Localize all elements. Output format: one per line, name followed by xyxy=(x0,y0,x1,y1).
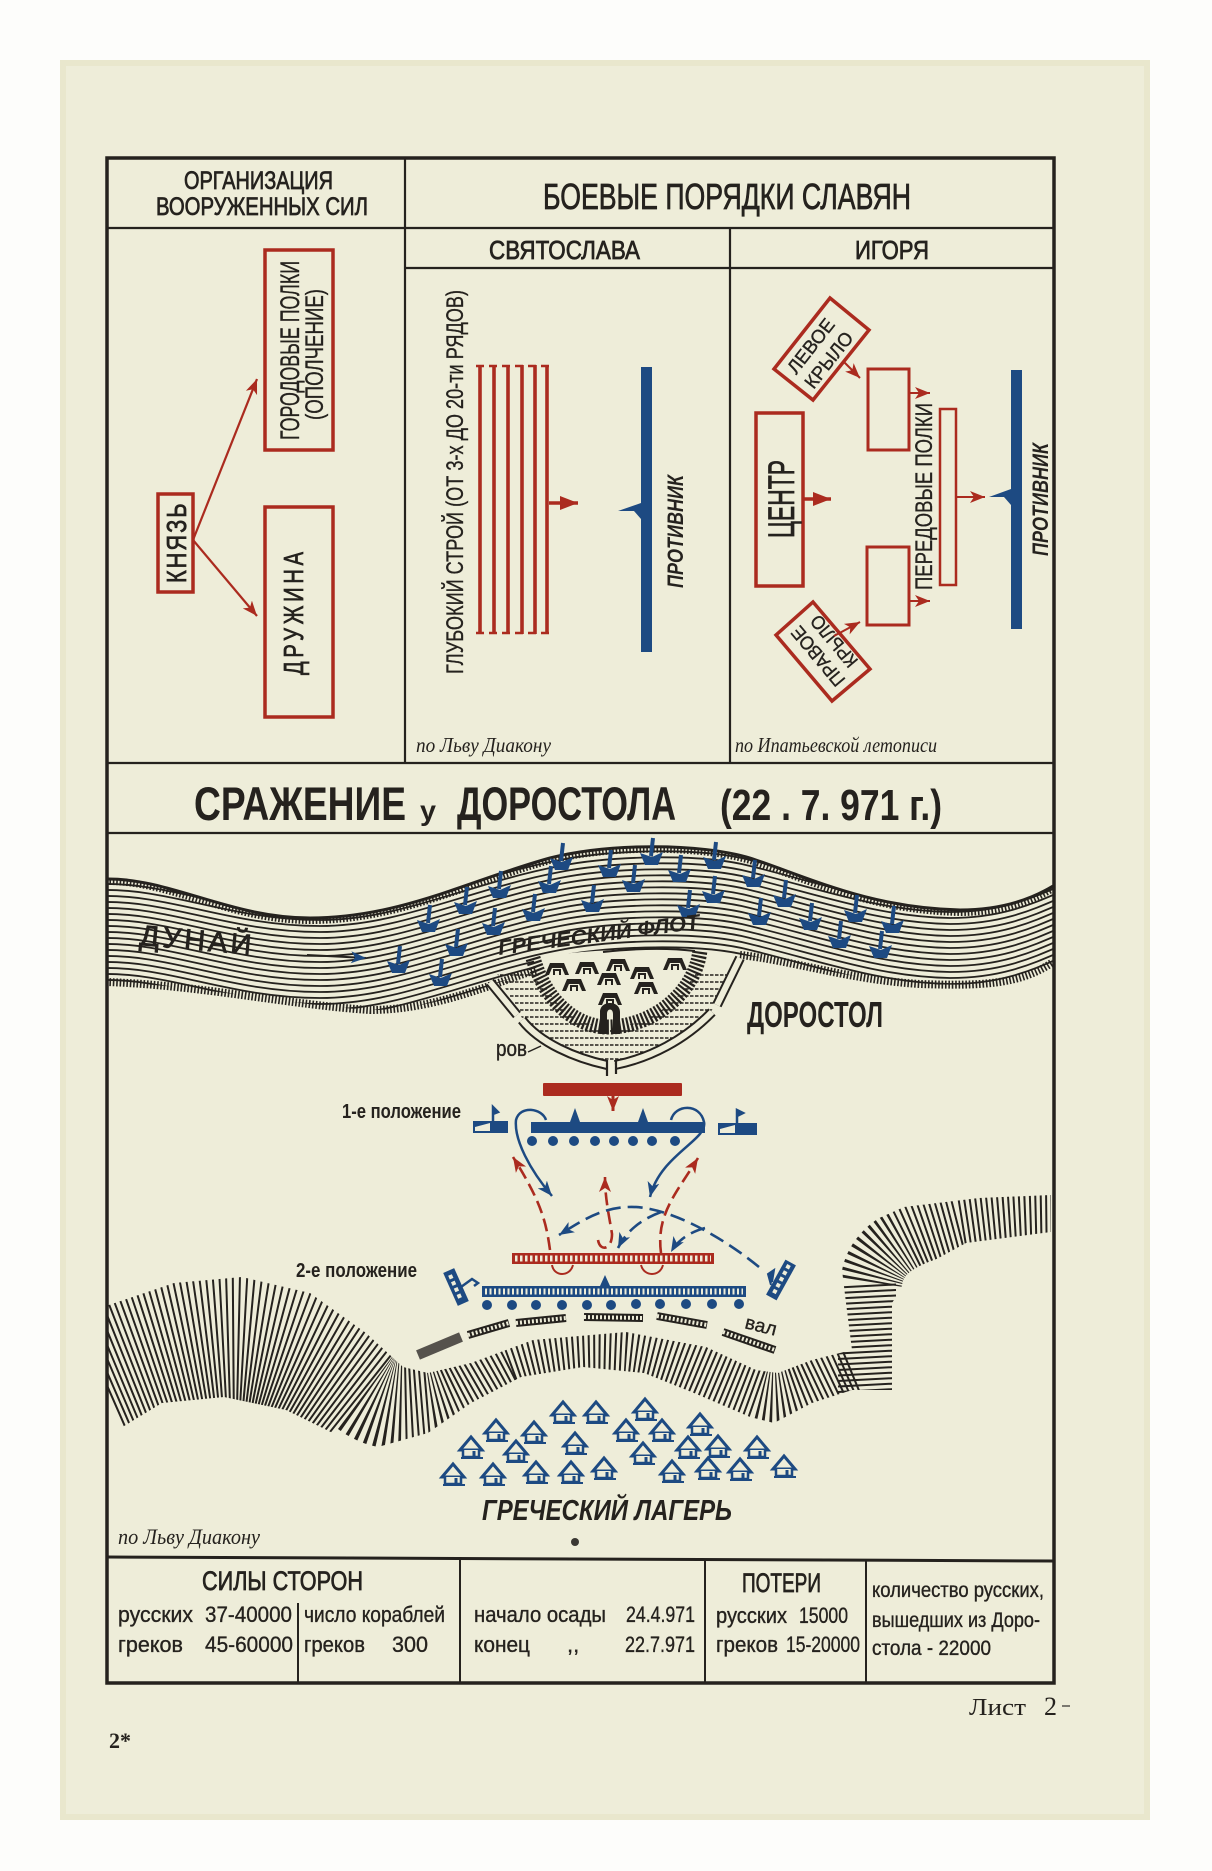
arrow from centre xyxy=(803,497,831,501)
heading: battle orders: БОЕВЫЕ ПОРЯДКИ СЛАВЯН xyxy=(543,176,911,217)
title: у xyxy=(420,795,436,826)
ships: 300 xyxy=(392,1632,428,1657)
box: druzhina: ДРУЖИНА xyxy=(279,551,310,675)
rotated caption: deep formation: ГЛУБОКИЙ СТРОЙ (ОТ 3-х ДО 20-ти РЯДОВ) xyxy=(441,290,469,674)
arrows from prince xyxy=(193,379,257,616)
sheet number: Лист xyxy=(969,1695,1027,1721)
label: rampart: вал xyxy=(743,1312,779,1341)
rampart segments xyxy=(418,1316,775,1355)
forward regiments label: ПЕРЕДОВЫЕ ПОЛКИ xyxy=(911,403,938,590)
blue enemy bar xyxy=(618,367,652,652)
box: city regiments: (ОПОЛЧЕНИЕ) xyxy=(301,289,329,420)
siege dates: конец xyxy=(474,1632,530,1657)
houses xyxy=(545,958,687,1005)
survivors note: количество русских, xyxy=(872,1579,1044,1602)
sheet number: 2 xyxy=(1044,1692,1057,1721)
hatched swamp band xyxy=(100,1213,1056,1405)
ships xyxy=(304,1602,445,1657)
blue dots xyxy=(482,1299,744,1310)
main frame xyxy=(107,158,1054,1683)
label: enemy: ПРОТИВНИК xyxy=(1028,442,1053,556)
Greek camp tents xyxy=(442,1399,796,1485)
panel: organisation of armed forces xyxy=(156,167,368,717)
losses: 15-20000 xyxy=(786,1632,860,1657)
box: druzhina xyxy=(265,507,333,717)
red ranks xyxy=(476,365,550,634)
label: moat: ров xyxy=(496,1036,527,1061)
forces: СИЛЫ СТОРОН xyxy=(202,1566,363,1596)
blue line xyxy=(531,1108,705,1133)
small arrows xyxy=(834,362,985,636)
left wing: КРЫЛО xyxy=(801,328,858,393)
forces xyxy=(118,1566,363,1657)
label: Dorostol: ДОРОСТОЛ xyxy=(747,994,883,1035)
forces: русских xyxy=(118,1602,193,1627)
right wing xyxy=(776,602,870,701)
blue comb bar xyxy=(482,1275,746,1297)
dot xyxy=(571,1538,579,1546)
gate xyxy=(600,1003,620,1034)
panel: Igor formation xyxy=(735,235,1053,757)
heading: organisation: ОРГАНИЗАЦИЯ xyxy=(184,167,333,195)
table dividers xyxy=(298,1558,866,1683)
losses xyxy=(716,1568,860,1657)
left flank xyxy=(473,1107,508,1133)
siege dates: 22.7.971 xyxy=(625,1632,695,1657)
box: city regiments: ГОРОДОВЫЕ ПОЛКИ xyxy=(275,261,305,440)
subheading: ИГОРЯ xyxy=(855,235,929,265)
position 2 xyxy=(296,1253,796,1310)
siege dates: 24.4.971 xyxy=(626,1602,695,1627)
forces: греков xyxy=(118,1632,183,1657)
left wing xyxy=(774,298,869,400)
panel: Svyatoslav formation xyxy=(416,235,688,757)
forces: 45-60000 xyxy=(205,1632,293,1657)
losses: греков xyxy=(716,1632,778,1657)
losses: русских xyxy=(716,1603,787,1628)
red arrow down xyxy=(612,1096,614,1111)
source note: по Ипатьевской летописи xyxy=(735,733,937,757)
red bar xyxy=(543,1083,682,1096)
source note: по Льву Диакону xyxy=(118,1524,260,1549)
title: ДОРОСТОЛА xyxy=(457,777,676,830)
blue dots xyxy=(527,1136,680,1146)
ditch segments xyxy=(490,958,740,1065)
fortress Dorostol xyxy=(490,949,745,1076)
box: prince: КНЯЗЬ xyxy=(161,503,193,583)
left flank xyxy=(443,1268,478,1306)
heading: organisation: ВООРУЖЕННЫХ СИЛ xyxy=(156,193,368,221)
Greek fleet boats xyxy=(387,838,904,986)
blue dashed arrows xyxy=(559,1207,759,1267)
losses: ПОТЕРИ xyxy=(742,1568,821,1598)
ships: греков xyxy=(304,1632,365,1657)
right flank xyxy=(718,1110,757,1135)
map: Danube river xyxy=(108,845,1052,1014)
centre box: ЦЕНТР xyxy=(761,460,802,538)
moat hatching xyxy=(490,975,745,1059)
centre box xyxy=(756,413,803,586)
red comb bar xyxy=(512,1253,714,1274)
heading: organisation xyxy=(156,167,368,221)
red arrow xyxy=(549,501,578,505)
title: СРАЖЕНИЕ xyxy=(194,777,406,830)
label: Danube: ДУНАЙ xyxy=(138,918,253,962)
right flank xyxy=(766,1260,796,1300)
river flow arrow xyxy=(307,955,366,958)
blue enemy bar xyxy=(989,370,1022,629)
left wing: ЛЕВОЕ xyxy=(784,315,840,378)
forces: 37-40000 xyxy=(205,1602,292,1627)
right wing: ПРАВОЕ xyxy=(788,621,850,690)
siege dates: начало осады xyxy=(474,1602,606,1627)
ships: число кораблей xyxy=(304,1602,445,1627)
label: second position: 2-е положение xyxy=(296,1260,417,1282)
label: first position: 1-е положение xyxy=(342,1101,461,1123)
losses: 15000 xyxy=(799,1603,848,1628)
page signature: 2* xyxy=(109,1728,131,1753)
box: city regiments xyxy=(265,250,333,450)
sheet number xyxy=(969,1692,1070,1721)
survivors note: стола - 22000 xyxy=(872,1637,991,1660)
subheading: СВЯТОСЛАВА xyxy=(489,235,641,265)
source note: по Льву Диакону xyxy=(416,733,552,757)
right wing: КРЫЛО xyxy=(807,610,863,671)
flank boxes xyxy=(867,369,909,625)
title: (22 . 7. 971 г.) xyxy=(720,781,942,830)
blue flanking arrows xyxy=(516,1108,704,1197)
position 1 xyxy=(342,1083,757,1197)
bottom table xyxy=(118,1558,1044,1683)
dashed attack arrows xyxy=(513,1157,759,1267)
label: Greek camp: ГРЕЧЕСКИЙ ЛАГЕРЬ xyxy=(482,1492,732,1527)
forward regiments bar xyxy=(940,409,956,585)
siege dates xyxy=(474,1602,695,1657)
label: enemy: ПРОТИВНИК xyxy=(663,474,688,588)
title xyxy=(194,777,942,830)
siege dates: ,, xyxy=(567,1632,579,1657)
survivors note: вышедших из Доро- xyxy=(872,1609,1040,1632)
label: Greek fleet: ГРЕЧЕСКИЙ ФЛОТ xyxy=(497,909,703,960)
city interior and wall xyxy=(533,949,700,1027)
survivors note xyxy=(872,1579,1044,1660)
red dashed arrows xyxy=(513,1157,698,1253)
